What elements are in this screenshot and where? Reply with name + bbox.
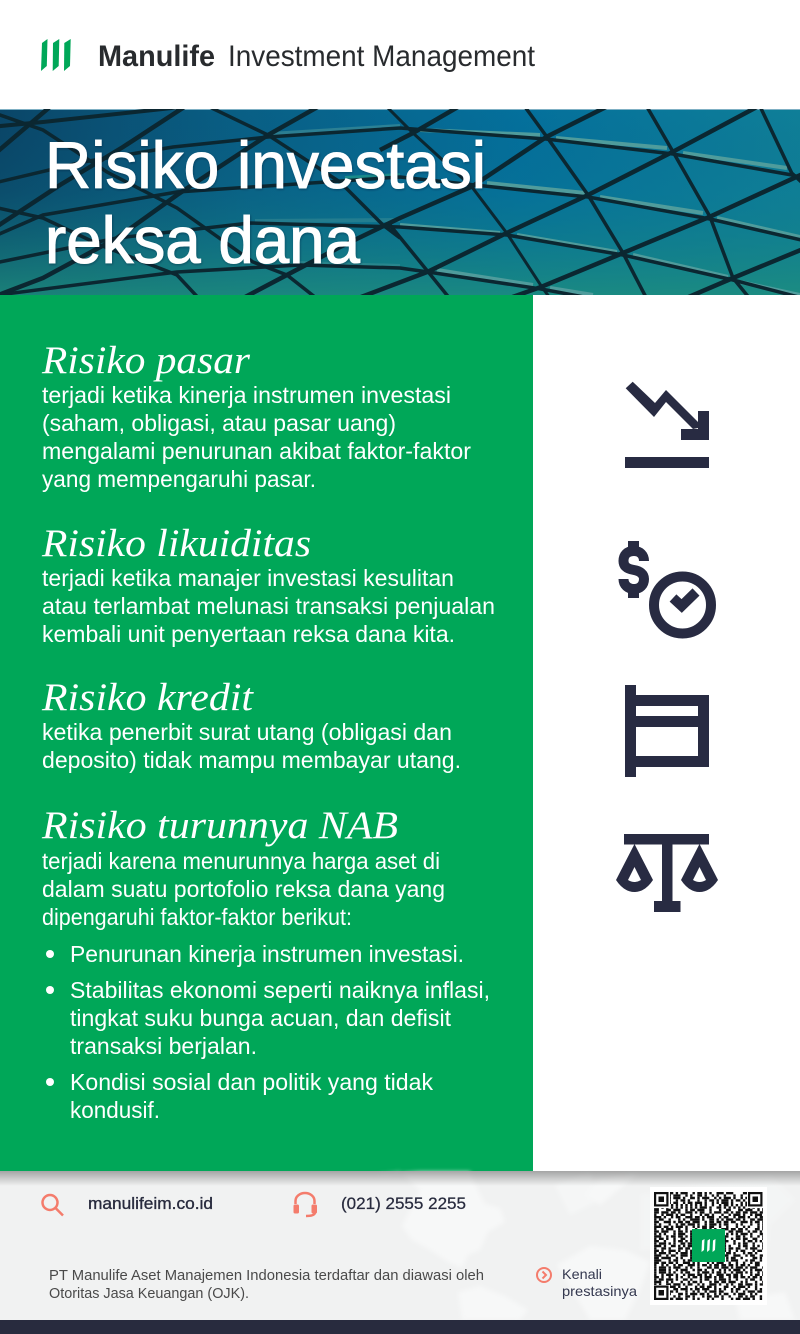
icon: falling chart arrow xyxy=(625,382,709,468)
world map background xyxy=(367,1172,795,1320)
hero banner: glass roof photo with title xyxy=(0,100,800,305)
call to action: Kenali xyxy=(562,1266,602,1282)
panel shadow xyxy=(0,1171,800,1186)
section: Risiko pasar: (saham, obligasi, atau pasar uang) xyxy=(42,410,396,436)
section: Risiko turunnya NAB xyxy=(41,804,445,930)
section: Risiko kredit: ketika penerbit surat utang (obligasi dan xyxy=(42,719,452,745)
photo: glass roof lattice xyxy=(0,100,800,305)
section: Risiko turunnya NAB: terjadi karena menurunnya harga aset di xyxy=(42,848,440,874)
title xyxy=(45,128,486,277)
title: reksa dana xyxy=(45,203,360,277)
QR code xyxy=(650,1187,767,1305)
section: Risiko likuiditas: Risiko likuiditas xyxy=(41,522,311,565)
panel: risk descriptions xyxy=(0,295,533,1171)
phone number: (021) 2555 2255 xyxy=(341,1194,466,1213)
regulatory note: PT Manulife Aset Manajemen Indonesia terdaftar dan diawasi oleh xyxy=(49,1267,484,1284)
bullet list: transaksi berjalan. xyxy=(70,1033,257,1059)
call to action: prestasinya xyxy=(562,1283,637,1299)
icon: search xyxy=(42,1195,63,1216)
QR finder patterns xyxy=(653,1191,764,1302)
section: Risiko turunnya NAB: Risiko turunnya NAB xyxy=(41,804,398,847)
bullet list: kondusif. xyxy=(70,1097,160,1123)
call to action xyxy=(562,1266,637,1299)
section: Risiko likuiditas: kembali unit penyertaan reksa dana kita. xyxy=(42,621,455,647)
bullet list: tingkat suku bunga acuan, dan defisit xyxy=(70,1005,452,1031)
section: Risiko likuiditas: terjadi ketika manajer investasi kesulitan xyxy=(42,565,454,591)
bullet list: Penurunan kinerja instrumen investasi. xyxy=(70,941,464,967)
section: Risiko kredit: Risiko kredit xyxy=(41,676,254,719)
section: Risiko pasar: yang mempengaruhi pasar. xyxy=(42,466,316,492)
logo wordmark xyxy=(98,40,536,73)
QR logo badge xyxy=(692,1229,725,1262)
section: Risiko turunnya NAB: dipengaruhi faktor-faktor berikut: xyxy=(42,904,352,930)
title: Risiko investasi xyxy=(45,128,486,202)
section: Risiko likuiditas: atau terlambat melunasi transaksi penjualan xyxy=(42,593,495,619)
icon: dollar and clock xyxy=(624,541,711,634)
icon: headset xyxy=(294,1193,316,1216)
icon: flag-shaped credit card xyxy=(625,685,709,777)
section: Risiko pasar xyxy=(41,339,471,492)
bullet list: Stabilitas ekonomi seperti naiknya inflasi, xyxy=(70,977,490,1003)
section: Risiko pasar: mengalami penurunan akibat faktor-faktor xyxy=(42,438,471,464)
section: Risiko pasar: Risiko pasar xyxy=(41,339,251,382)
icon: balance scale xyxy=(616,834,718,912)
section: Risiko turunnya NAB: dalam suatu portofolio reksa dana yang xyxy=(42,876,445,902)
regulatory note: Otoritas Jasa Keuangan (OJK). xyxy=(49,1285,249,1302)
regulatory note xyxy=(49,1267,484,1302)
website: manulifeim.co.id xyxy=(88,1194,213,1213)
footer xyxy=(0,1171,800,1334)
logo wordmark: Investment Management xyxy=(228,40,536,73)
dark bottom bar xyxy=(0,1320,800,1334)
icon: three green stripes xyxy=(41,39,71,71)
bullet list xyxy=(46,941,490,1123)
section: Risiko kredit: deposito) tidak mampu membayar utang. xyxy=(42,747,461,773)
logo: Manulife Investment Management xyxy=(41,39,536,73)
icon: chevron circle xyxy=(537,1268,551,1282)
section: Risiko likuiditas xyxy=(41,522,495,647)
logo wordmark: Manulife xyxy=(98,40,215,73)
bullet list: Kondisi sosial dan politik yang tidak xyxy=(70,1069,433,1095)
section: Risiko kredit xyxy=(41,676,461,773)
section: Risiko pasar: terjadi ketika kinerja instrumen investasi xyxy=(42,382,451,408)
